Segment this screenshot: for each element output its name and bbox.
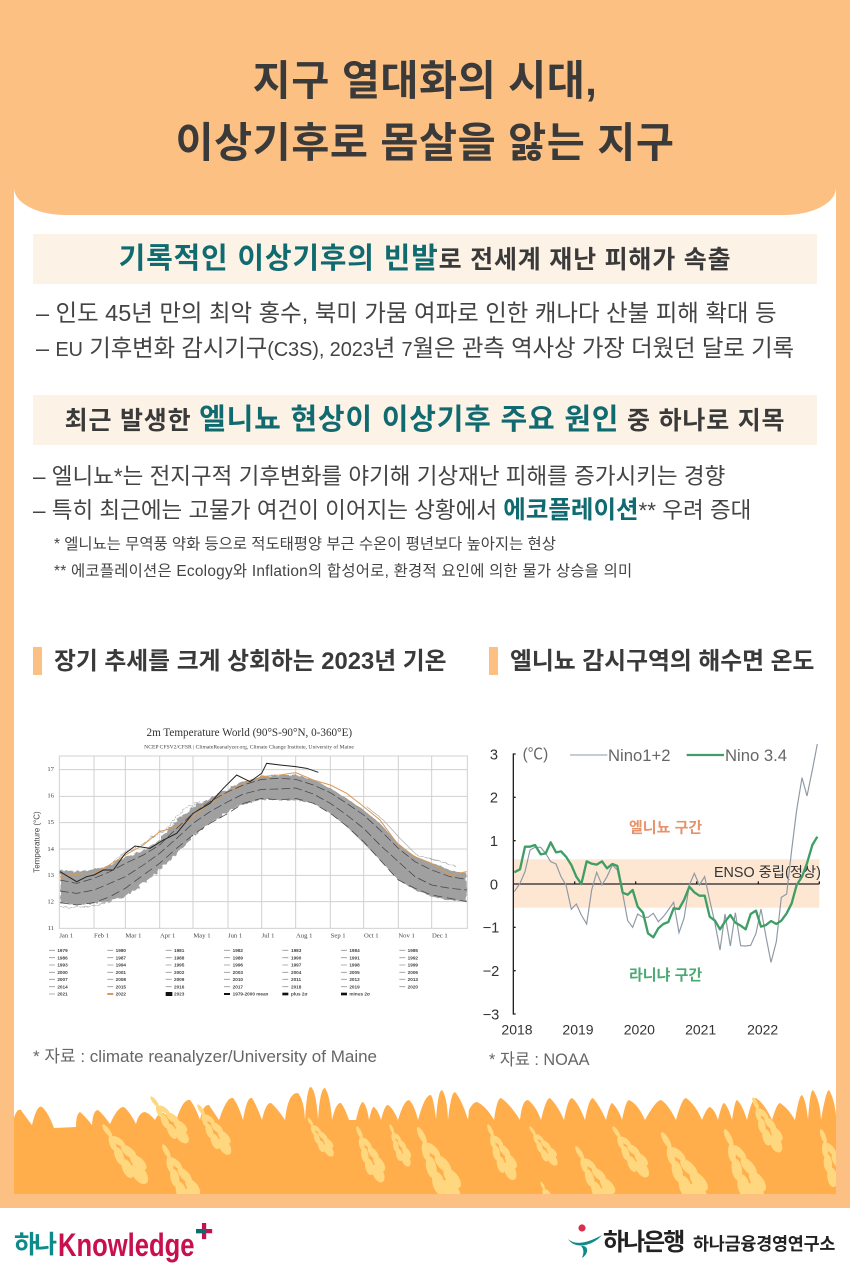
y axis labels: 0 (490, 877, 498, 893)
legend: 1984 (349, 948, 360, 953)
plot grid (59, 756, 467, 928)
institute name: 하나금융경영연구소 (693, 1234, 835, 1254)
bullet: India floods: – 인도 45년 만의 최악 홍수, 북미 가뭄 여파로 인한 캐나다 산불 피해 확대 등 (36, 300, 777, 326)
x axis months: May 1 (193, 933, 211, 940)
bullet: ecoflation: – 특히 최근에는 고물가 여건이 이어지는 상황에서 에코플레이션** 우려 증대 (33, 497, 751, 524)
x axis months: Sep 1 (331, 933, 346, 940)
legend: 1983 (291, 948, 302, 953)
x axis months: Aug 1 (296, 933, 312, 940)
x axis months (59, 933, 448, 940)
legend: 2017 (233, 984, 243, 989)
legend: 1987 (116, 955, 126, 960)
bank name: 하나은행 (603, 1229, 683, 1256)
legend (49, 948, 418, 997)
legend: Nino 3.4 (725, 746, 787, 765)
legend: 2001 (116, 970, 126, 975)
heading text: 기록적인 이상기후의 빈발로 전세계 재난 피해가 속출 (119, 243, 731, 275)
legend: 2023 (174, 992, 185, 997)
legend: 1990 (291, 955, 302, 960)
legend: 2004 (291, 970, 302, 975)
source right: * 자료 : NOAA (489, 1051, 590, 1069)
legend: 1986 (57, 955, 68, 960)
legend: 1980 (116, 948, 126, 953)
x axis labels: 2019 (562, 1021, 594, 1037)
chart heading left: 장기 추세를 크게 상회하는 2023년 기온 (54, 648, 446, 675)
legend: 2007 (57, 977, 68, 982)
source left: * 자료 : climate reanalyzer/University of Maine (33, 1047, 377, 1066)
legend: 2014 (57, 984, 68, 989)
zone label: El Nino: 엘니뇨 구간 (629, 819, 702, 836)
footnote two: ** 에코플레이션은 Ecology와 Inflation의 합성어로, 환경적 요인에 의한 물가 상승을 의미 (54, 563, 632, 580)
x axis months: Jun 1 (228, 933, 242, 940)
legend: 1997 (291, 963, 302, 968)
y axis labels: 14 (47, 846, 55, 853)
legend: 2022 (116, 992, 126, 997)
x axis months: Nov 1 (398, 933, 415, 940)
neutral band (513, 859, 819, 908)
y axis labels: −3 (483, 1007, 499, 1023)
legend: 1989 (233, 955, 243, 960)
y axis labels: 12 (47, 899, 54, 906)
wheat ears (92, 1090, 850, 1222)
chart: sea surface temperature (483, 744, 821, 1037)
legend: 1993 (57, 963, 68, 968)
bullet: C3S: – EU 기후변화 감시기구(C3S), 2023년 7월은 관측 역사상 가장 더웠던 달로 기록 (36, 335, 794, 361)
zone label: La Nina: 라니냐 구간 (629, 967, 702, 984)
line: Nino 3.4 (514, 837, 817, 937)
x axis months: Dec 1 (432, 933, 448, 940)
legend: 2009 (174, 977, 185, 982)
legend: 1988 (174, 955, 185, 960)
legend: 1992 (408, 955, 418, 960)
section box: heading one (33, 234, 817, 284)
y axis labels (47, 766, 55, 932)
legend: 1994 (116, 963, 126, 968)
title: 지구 열대화의 시대, (253, 58, 597, 104)
logo plus sign (196, 1223, 212, 1240)
axes (513, 754, 819, 1014)
y axis labels: 11 (48, 925, 54, 932)
legend: 2003 (233, 970, 243, 975)
logo wordmark Hana: 하나 (14, 1231, 54, 1259)
unit label: (℃) (523, 746, 548, 763)
heading text: 최근 발생한 엘니뇨 현상이 이상기후 주요 원인 중 하나로 지목 (65, 404, 785, 436)
x axis months: Mar 1 (125, 933, 141, 940)
x axis labels (501, 1021, 778, 1037)
x axis months: Oct 1 (364, 933, 379, 940)
bullet: El Nino: – 엘니뇨*는 전지구적 기후변화를 야기해 기상재난 피해를 증가시키는 경향 (33, 464, 725, 489)
x axis months: Feb 1 (94, 933, 109, 940)
x axis months: Jan 1 (59, 933, 73, 940)
section box: heading two (33, 395, 817, 445)
y axis labels: 17 (47, 766, 55, 773)
title: 이상기후로 몸살을 앓는 지구 (176, 120, 674, 166)
legend: 2005 (349, 970, 360, 975)
wheat grass mass (14, 1087, 836, 1194)
legend: 1982 (233, 948, 243, 953)
x axis labels: 2018 (501, 1021, 533, 1037)
wheat field illustration (14, 1087, 836, 1194)
legend: 1979-2000 mean (233, 992, 269, 997)
footer logo: Hana Knowledge (14, 1223, 212, 1263)
legend: 2021 (57, 992, 68, 997)
legend: 1999 (408, 963, 418, 968)
legend: 2016 (174, 984, 185, 989)
title (176, 58, 674, 166)
legend: 2018 (291, 984, 302, 989)
legend: 2012 (349, 977, 360, 982)
chart title: 2m Temperature World (90°S-90°N, 0-360°E) (147, 727, 352, 739)
accent bar right (489, 647, 498, 675)
x axis months: Apr 1 (160, 933, 175, 940)
legend: 1995 (174, 963, 185, 968)
legend: 2010 (233, 977, 243, 982)
y axis labels: 3 (490, 747, 498, 763)
legend: 2002 (174, 970, 185, 975)
accent bar left (33, 647, 42, 675)
legend: 1981 (174, 948, 185, 953)
legend: Nino1+2 (608, 746, 671, 765)
y axis labels: −2 (483, 964, 499, 980)
y axis labels: 2 (490, 791, 498, 807)
footer logo: Hana Bank (568, 1224, 835, 1258)
zone label: ENSO neutral: ENSO 중립(정상) (714, 864, 821, 881)
y axis labels: 13 (47, 872, 55, 879)
black line 2023 (60, 763, 318, 882)
dashed plus two sigma (60, 778, 467, 883)
dashed mean (60, 788, 467, 893)
grey yearly temperature band (60, 775, 467, 907)
legend: 2019 (349, 984, 360, 989)
footnote one: * 엘니뇨는 무역풍 약화 등으로 적도태평양 부근 수온이 평년보다 높아지는 현상 (54, 536, 556, 553)
legend: 1991 (349, 955, 360, 960)
header banner (14, 0, 836, 215)
legend: 2015 (116, 984, 126, 989)
white content panel (14, 188, 836, 1194)
legend (570, 746, 787, 765)
x axis labels: 2021 (685, 1021, 716, 1037)
legend: 1979 (57, 948, 68, 953)
x axis months: Jul 1 (262, 933, 274, 940)
legend: 2020 (408, 984, 418, 989)
legend: 1985 (408, 948, 418, 953)
legend: plus 2σ (291, 992, 308, 997)
legend: 1998 (349, 963, 360, 968)
chart: world temperature (32, 727, 468, 997)
legend: 2008 (116, 977, 126, 982)
y axis labels: −1 (483, 921, 499, 937)
y axis title: Temperature (°C) (32, 811, 41, 873)
logo wordmark Knowledge: Knowledge (58, 1227, 195, 1263)
y axis labels (483, 747, 499, 1023)
legend: 2011 (291, 977, 302, 982)
y axis labels: 16 (47, 793, 55, 800)
legend: minus 2σ (349, 992, 371, 997)
orange line 2022 (60, 773, 467, 877)
legend: 2006 (408, 970, 418, 975)
x axis labels: 2020 (624, 1021, 655, 1037)
dashed minus two sigma (60, 798, 467, 905)
chart heading right: 엘니뇨 감시구역의 해수면 온도 (510, 648, 814, 675)
line: Nino 1+2 (514, 744, 817, 962)
legend: 2013 (408, 977, 418, 982)
legend: 2000 (57, 970, 68, 975)
y axis labels: 15 (47, 819, 55, 826)
y axis labels: 1 (490, 834, 498, 850)
bank symbol (568, 1224, 602, 1258)
chart subtitle: NCEP CFSV2/CFSR | ClimateReanalyzer.org, Climate Change Institute, University of Maine (144, 743, 354, 750)
x axis labels: 2022 (747, 1021, 778, 1037)
legend: 1996 (233, 963, 243, 968)
